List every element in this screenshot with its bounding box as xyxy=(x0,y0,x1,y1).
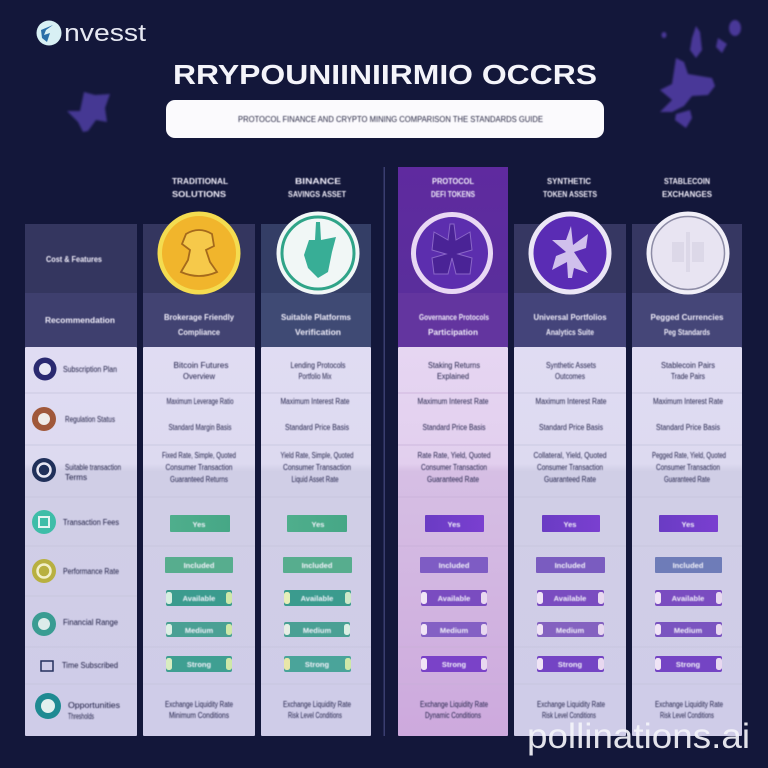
panel: column 5 white: Peg Standards xyxy=(664,328,710,337)
panel: column 3 highlighted purple: Governance Protocols xyxy=(419,313,489,322)
status pills: Yes xyxy=(564,520,576,529)
status pills: Medium xyxy=(303,626,331,635)
panel: column 5 white: Pegged Currencies xyxy=(650,313,724,322)
status pills: Medium xyxy=(556,626,584,635)
panel: row labels column: Thresholds xyxy=(68,712,94,721)
panel: column 1 yellow xyxy=(143,212,255,736)
column headers xyxy=(172,177,346,199)
column headers: BINANCE xyxy=(295,177,342,186)
panel: column 3 highlighted purple: Standard Price Basis xyxy=(422,423,486,432)
panel: column 1 yellow: Exchange Liquidity Rate xyxy=(165,700,233,709)
status pills: Available xyxy=(672,594,704,603)
status pills: Available xyxy=(554,594,586,603)
panel: column 2 green: Liquid Asset Rate xyxy=(292,475,339,484)
panel: column 4 violet: Collateral, Yield, Quoted xyxy=(534,451,606,460)
subtitle pill xyxy=(166,100,604,138)
panel: column 2 green: Lending Protocols xyxy=(290,361,346,370)
panel: column 1 yellow: Guaranteed Returns xyxy=(170,475,228,484)
status pills: Yes xyxy=(193,520,205,529)
center divider xyxy=(384,167,385,736)
panel: row labels column: Financial Range xyxy=(63,618,119,627)
panel: column 5 white: Trade Pairs xyxy=(671,372,705,381)
status pills: Included xyxy=(184,561,215,570)
status pills: Available xyxy=(183,594,215,603)
panel: row labels column: Time Subscribed xyxy=(62,661,118,670)
status pills: Yes xyxy=(448,520,460,529)
column headers: SAVINGS ASSET xyxy=(288,190,346,199)
panel: column 1 yellow: Compliance xyxy=(178,328,221,337)
panel: column 5 white: Maximum Interest Rate xyxy=(653,397,723,406)
panel: column 2 green: Risk Level Conditions xyxy=(288,711,342,720)
panel: column 5 white: EXCHANGES xyxy=(662,190,713,199)
panel: column 3 highlighted purple: Maximum Interest Rate xyxy=(418,397,489,406)
panel: column 4 violet: SYNTHETIC xyxy=(547,177,591,186)
icon: white coin xyxy=(646,212,730,294)
decoration: right purple splat xyxy=(660,20,741,128)
status pills xyxy=(655,515,722,672)
panel: row labels column: Subscription Plan xyxy=(63,365,117,374)
panel: column 2 green xyxy=(261,212,371,736)
panel: column 3 highlighted purple: Staking Returns xyxy=(428,361,480,370)
status pills xyxy=(283,515,352,672)
panel: column 3 highlighted purple: Participation xyxy=(428,328,478,337)
subtitle pill: PROTOCOL FINANCE AND CRYPTO MINING COMPARISON THE STANDARDS GUIDE xyxy=(238,115,543,124)
panel: column 5 white: Risk Level Conditions xyxy=(660,711,714,720)
panel: column 2 green: Suitable Platforms xyxy=(281,313,352,322)
status pills: Strong xyxy=(305,660,329,669)
panel: column 3 highlighted purple: DEFI TOKENS xyxy=(431,190,476,199)
status pills: Available xyxy=(301,594,333,603)
panel: column 1 yellow: Maximum Leverage Ratio xyxy=(166,397,234,406)
panel: column 4 violet: Consumer Transaction xyxy=(537,463,603,472)
logo: nvesst xyxy=(64,20,146,47)
panel: column 3 highlighted purple xyxy=(398,167,508,736)
panel: column 4 violet: Synthetic Assets xyxy=(546,361,596,370)
status pills: Included xyxy=(439,561,470,570)
panel: row labels column: Transaction Fees xyxy=(63,518,119,527)
panel: column 2 green: Verification xyxy=(295,328,341,337)
watermark: pollinations.ai xyxy=(527,717,750,756)
panel: row labels column: Opportunities xyxy=(68,701,120,710)
icon: purple coin xyxy=(411,212,493,294)
panel: row labels column: Recommendation xyxy=(45,316,115,325)
panel: column 4 violet: Standard Price Basis xyxy=(539,423,603,432)
panel: column 3 highlighted purple: Exchange Liquidity Rate xyxy=(420,700,488,709)
panel: column 4 violet xyxy=(514,177,626,736)
panel: column 5 white: Standard Price Basis xyxy=(656,423,720,432)
panel: column 1 yellow: Fixed Rate, Simple, Quoted xyxy=(162,451,236,460)
status pills: Strong xyxy=(442,660,466,669)
panel: column 3 highlighted purple: PROTOCOL xyxy=(432,177,474,186)
column headers: SOLUTIONS xyxy=(172,190,227,199)
panel: column 4 violet: TOKEN ASSETS xyxy=(543,190,598,199)
panel: column 4 violet: Risk Level Conditions xyxy=(542,711,596,720)
panel: column 5 white xyxy=(632,177,742,736)
panel: column 5 white: Pegged Rate, Yield, Quoted xyxy=(652,451,726,460)
panel: column 5 white: Stablecoin Pairs xyxy=(661,361,715,370)
panel: column 5 white: STABLECOIN xyxy=(664,177,710,186)
panel: column 5 white: Consumer Transaction xyxy=(656,463,720,472)
status pills: Medium xyxy=(185,626,213,635)
status pills: Strong xyxy=(187,660,211,669)
panel: column 5 white: Exchange Liquidity Rate xyxy=(655,700,723,709)
panel: column 3 highlighted purple: Dynamic Conditions xyxy=(425,711,481,720)
decoration: left purple splat xyxy=(67,92,110,132)
panel: column 1 yellow: Brokerage Friendly xyxy=(164,313,235,322)
panel: column 1 yellow: Bitcoin Futures xyxy=(174,361,228,370)
status pills: Available xyxy=(438,594,470,603)
panel: column 1 yellow: Standard Margin Basis xyxy=(168,423,232,432)
panel: column 1 yellow: Consumer Transaction xyxy=(166,463,232,472)
logo xyxy=(36,20,146,47)
panel: row labels column: Suitable transaction xyxy=(65,463,121,472)
status pills: Yes xyxy=(312,520,324,529)
panel: column 1 yellow: Minimum Conditions xyxy=(169,711,229,720)
panel: column 4 violet: Outcomes xyxy=(555,372,585,381)
status pills: Included xyxy=(555,561,586,570)
panel: column 1 yellow: Overview xyxy=(183,372,215,381)
column headers: TRADITIONAL xyxy=(172,177,228,186)
title: RRYPOUNIINIIRMIO OCCRS xyxy=(173,59,597,90)
panel: column 3 highlighted purple: Rate Rate, Yield, Quoted xyxy=(418,451,490,460)
icon: yellow coin xyxy=(158,212,240,294)
panel: column 4 violet: Analytics Suite xyxy=(546,328,594,337)
panel: row labels column xyxy=(25,224,137,736)
status pills: Strong xyxy=(558,660,582,669)
panel: row labels column: Performance Rate xyxy=(63,567,119,576)
panel: column 2 green: Exchange Liquidity Rate xyxy=(283,700,351,709)
status pills xyxy=(536,515,605,672)
status pills: Medium xyxy=(674,626,702,635)
panel: column 3 highlighted purple: Consumer Transaction xyxy=(421,463,487,472)
status pills: Included xyxy=(302,561,333,570)
panel: column 3 highlighted purple: Guaranteed Rate xyxy=(427,475,479,484)
icon: violet coin xyxy=(528,212,612,294)
status pills xyxy=(165,515,233,672)
panel: column 4 violet: Universal Portfolios xyxy=(534,313,607,322)
panel: column 2 green: Standard Price Basis xyxy=(285,423,349,432)
panel: column 2 green: Yield Rate, Simple, Quoted xyxy=(280,451,354,460)
status pills: Medium xyxy=(440,626,468,635)
status pills xyxy=(420,515,488,672)
panel: column 2 green: Portfolio Mix xyxy=(298,372,332,381)
panel: column 2 green: Maximum Interest Rate xyxy=(280,397,350,406)
status pills: Strong xyxy=(676,660,700,669)
panel: column 3 highlighted purple: Explained xyxy=(437,372,469,381)
status pills: Yes xyxy=(682,520,694,529)
panel: row labels column: Regulation Status xyxy=(65,415,115,424)
panel: row labels column: Cost & Features xyxy=(46,255,102,264)
panel: column 4 violet: Maximum Interest Rate xyxy=(536,397,607,406)
panel: column 4 violet: Guaranteed Rate xyxy=(544,475,596,484)
panel: row labels column: Terms xyxy=(65,473,87,482)
panel: column 5 white: Guaranteed Rate xyxy=(664,475,710,484)
status pills: Included xyxy=(673,561,704,570)
icon: green coin xyxy=(276,212,360,294)
panel: column 4 violet: Exchange Liquidity Rate xyxy=(537,700,605,709)
panel: column 2 green: Consumer Transaction xyxy=(283,463,351,472)
